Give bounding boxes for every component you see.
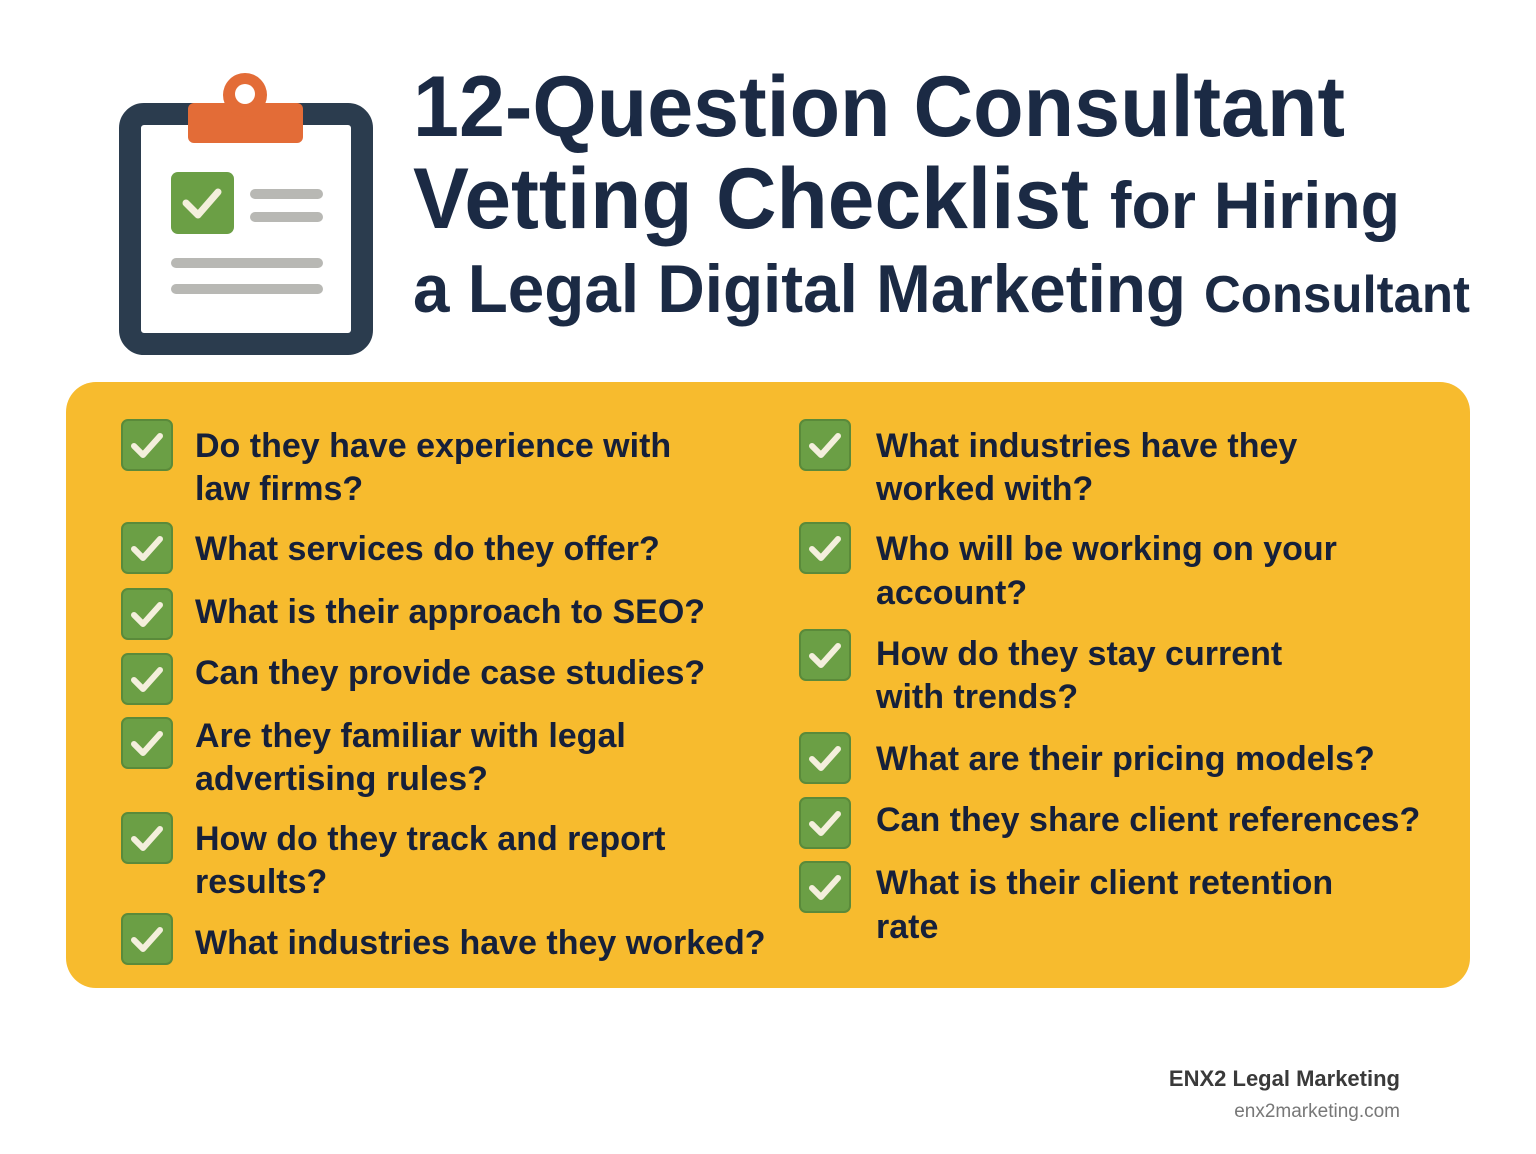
title: Consultant (1204, 266, 1470, 324)
right column questions: What are their pricing models? (876, 740, 1375, 778)
title: for Hiring (1110, 168, 1400, 242)
left column questions: advertising rules? (195, 760, 488, 798)
right column questions: Can they share client references? (876, 801, 1420, 839)
left column questions: Do they have experience with (195, 427, 671, 465)
left column questions: Are they familiar with legal (195, 717, 626, 755)
right column questions: What industries have they (876, 427, 1297, 465)
right column questions: What is their client retention (876, 864, 1333, 902)
icon: clipboard (130, 73, 362, 344)
left column questions: What industries have they worked? (195, 924, 766, 962)
title: a Legal Digital Marketing (413, 251, 1186, 327)
left column questions: Can they provide case studies? (195, 654, 705, 692)
left column questions: results? (195, 863, 327, 901)
right column questions: rate (876, 908, 938, 946)
title: 12-Question Consultant (413, 59, 1345, 155)
right column questions (800, 420, 1420, 946)
right column questions: How do they stay current (876, 635, 1282, 673)
footer: brand: ENX2 Legal Marketing (1169, 1066, 1400, 1091)
left column questions: How do they track and report (195, 820, 665, 858)
left column questions: law firms? (195, 470, 363, 508)
right column questions: worked with? (875, 470, 1093, 508)
left column questions: What services do they offer? (195, 530, 660, 568)
title (413, 59, 1470, 327)
right column questions: Who will be working on your (876, 530, 1337, 568)
left column questions: What is their approach to SEO? (195, 593, 705, 631)
left column questions (122, 420, 766, 964)
footer: brand: enx2marketing.com (1234, 1101, 1400, 1122)
title: Vetting Checklist (413, 151, 1089, 247)
panel: checklist (66, 382, 1470, 988)
right column questions: account? (876, 574, 1027, 612)
footer: brand (1169, 1066, 1400, 1122)
right column questions: with trends? (875, 678, 1078, 716)
